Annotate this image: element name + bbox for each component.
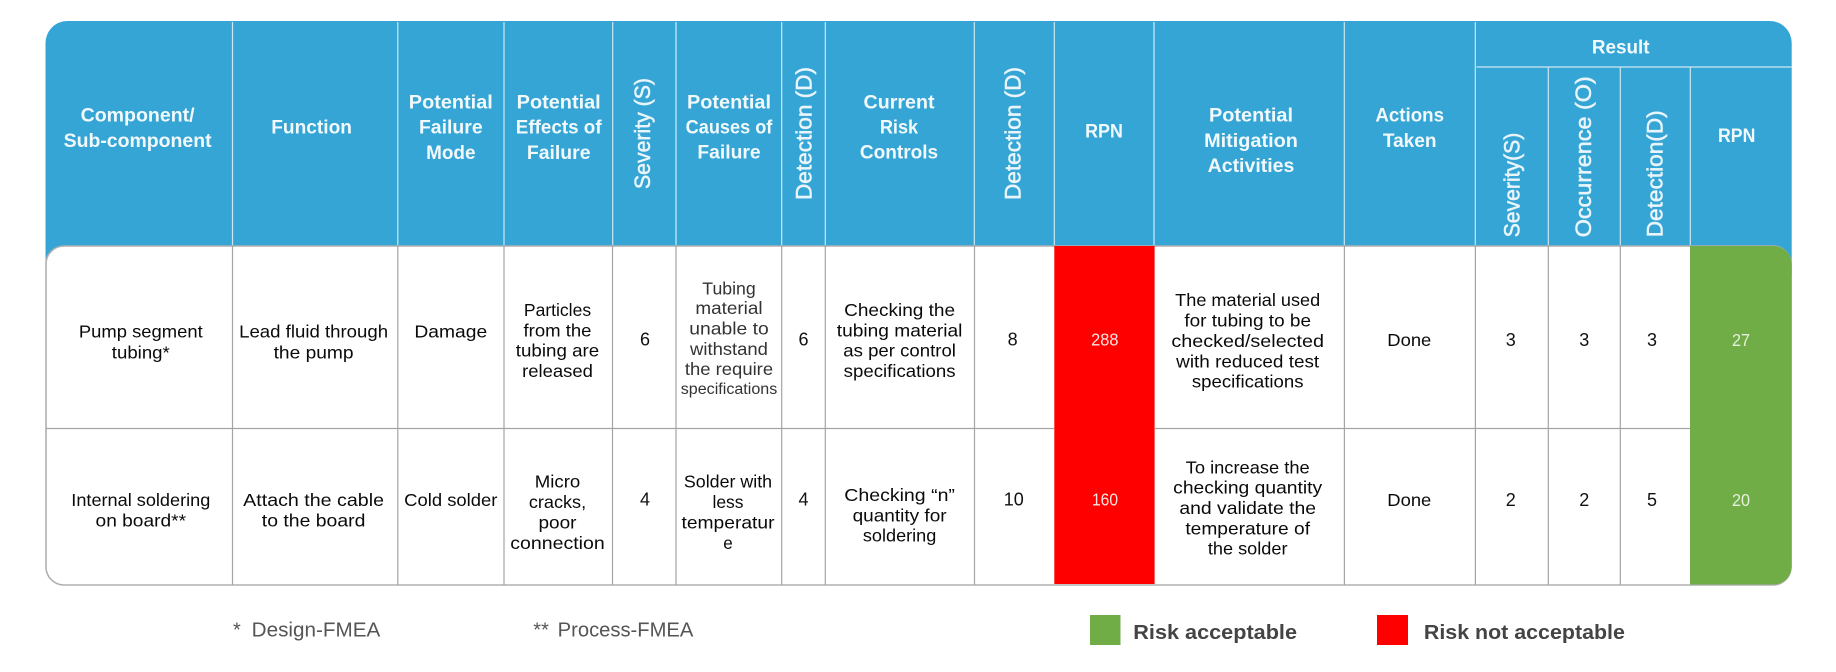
cell: detection: 6 <box>798 330 809 350</box>
cell: result detection: 3 <box>1647 330 1657 350</box>
heading: Potential Failure Mode: Mode <box>426 142 476 164</box>
RPN cells, red <box>1054 246 1155 584</box>
legend: risk acceptable <box>1090 615 1297 645</box>
cell: effects <box>510 472 605 553</box>
cell: current controls: Checking the <box>844 300 955 320</box>
heading: Potential Failure Mode: Potential <box>409 91 493 113</box>
cell: current controls: specifications <box>844 361 956 381</box>
legend: risk not acceptable <box>1377 615 1625 645</box>
heading: Potential Mitigation Activities: Potential <box>1209 105 1293 127</box>
heading: Current Risk Controls: Current <box>864 91 935 113</box>
cell: effects: cracks, <box>529 492 586 512</box>
cell: mitigation: the solder <box>1208 539 1288 559</box>
RPN cells, green <box>1690 246 1792 584</box>
footnote: Design-FMEA: * <box>233 620 241 642</box>
cell: causes: specifications <box>681 381 778 398</box>
cell: detection: 4 <box>798 490 809 510</box>
cell: effects: connection <box>510 533 605 553</box>
cell: function: to the board <box>262 511 365 531</box>
cell: failure mode: Damage <box>414 322 487 342</box>
heading: Detection (D) second: Detection (D) <box>1001 67 1026 200</box>
cell: function: the pump <box>274 342 354 362</box>
cell: mitigation: temperature of <box>1185 518 1310 538</box>
cell: result RPN 20: 20 <box>1732 490 1750 510</box>
cell: detection value: 8 <box>1008 330 1018 350</box>
cell: mitigation: for tubing to be <box>1184 311 1311 331</box>
cell: actions: Done <box>1387 330 1431 350</box>
cell: causes <box>682 472 775 553</box>
cell: current controls: Checking “n” <box>844 485 955 505</box>
cell: component: Internal soldering <box>71 490 210 510</box>
cell: causes: less <box>712 492 744 512</box>
cell: current controls: tubing material <box>837 320 962 340</box>
legend: risk acceptable: Risk acceptable <box>1133 622 1297 644</box>
cell: causes: e <box>723 533 733 553</box>
footnote: Design-FMEA: Design-FMEA <box>252 620 381 642</box>
cell: current controls <box>837 300 962 381</box>
heading: Potential Causes of Failure <box>686 91 773 164</box>
cell: effects <box>516 300 599 381</box>
heading: Detection (D): Detection (D) <box>792 67 817 200</box>
heading: Component/Sub-component: Component/ <box>81 105 195 127</box>
cell: effects: from the <box>524 320 592 340</box>
heading: Result Detection(D): Detection(D) <box>1643 110 1668 237</box>
cell: mitigation <box>1171 290 1324 392</box>
cell: effects: Particles <box>524 300 591 320</box>
heading: Potential Causes of Failure: Causes of <box>686 117 773 139</box>
cell: function: Lead fluid through <box>239 322 388 342</box>
cell: mitigation: with reduced test <box>1175 351 1319 371</box>
cell: component <box>79 322 203 362</box>
cell: mitigation: The material used <box>1175 290 1320 310</box>
cell: causes: material <box>695 298 763 318</box>
heading: Potential Causes of Failure: Failure <box>697 142 761 164</box>
cell: current controls: soldering <box>863 526 936 546</box>
cell: function <box>243 490 384 531</box>
cell: result severity: 3 <box>1506 330 1516 350</box>
cell: current controls: quantity for <box>853 506 947 526</box>
cell: effects: released <box>522 361 593 381</box>
panel: table header band <box>46 21 1792 275</box>
cell: causes: withstand <box>689 339 768 359</box>
cell: function: Attach the cable <box>243 490 384 510</box>
cell: causes: temperatur <box>682 513 775 533</box>
cell: mitigation: checking quantity <box>1173 478 1322 498</box>
row 2: internal soldering <box>71 457 1750 559</box>
cell: component <box>71 490 210 531</box>
cell: function <box>239 322 388 362</box>
heading: Current Risk Controls <box>860 91 938 164</box>
row 1: pump segment tubing <box>79 278 1750 398</box>
heading: Result RPN: RPN <box>1718 125 1755 147</box>
cell: mitigation: To increase the <box>1186 457 1310 477</box>
cell: result RPN 27: 27 <box>1732 330 1750 350</box>
cell: component: Pump segment <box>79 322 203 342</box>
cell: causes: unable to <box>689 318 769 338</box>
cell: result detection: 5 <box>1647 490 1657 510</box>
cell: causes: Solder with <box>684 472 772 492</box>
heading: Result: Result <box>1592 36 1650 58</box>
cell: component: tubing* <box>112 342 170 362</box>
cell: current controls <box>844 485 955 546</box>
cell: severity: 6 <box>640 330 650 350</box>
heading: Component/Sub-component: Sub-component <box>64 130 212 152</box>
cell: mitigation: and validate the <box>1179 498 1316 518</box>
footnote: Process-FMEA: ** <box>533 620 549 642</box>
cell: current controls: as per control <box>843 341 956 361</box>
heading: Potential Failure Mode: Failure <box>419 117 483 139</box>
panel: table body <box>46 246 1791 585</box>
cell: mitigation: specifications <box>1192 372 1304 392</box>
heading: Severity (S): Severity (S) <box>630 78 655 189</box>
cell: RPN 288: 288 <box>1091 330 1118 350</box>
cell: mitigation <box>1173 457 1322 559</box>
cell: effects: tubing are <box>516 341 599 361</box>
cell: causes: the require <box>685 359 773 379</box>
cell: causes: Tubing <box>702 278 756 298</box>
cell: failure mode: Cold solder <box>404 490 498 510</box>
heading: Actions Taken: Actions <box>1375 105 1444 127</box>
heading: Potential Effects of Failure: Failure <box>527 142 591 164</box>
cell: effects: Micro <box>535 472 580 492</box>
footnote: Process-FMEA: Process-FMEA <box>558 620 694 642</box>
cell: result occurrence: 3 <box>1579 330 1589 350</box>
heading: Potential Mitigation Activities: Mitigation <box>1204 130 1298 152</box>
heading: Potential Effects of Failure: Effects of <box>516 117 602 139</box>
heading: Potential Failure Mode <box>409 91 493 164</box>
heading: Actions Taken <box>1375 105 1444 152</box>
cell: detection value: 10 <box>1004 490 1024 510</box>
heading: RPN: RPN <box>1085 121 1123 143</box>
cell: component: on board** <box>96 511 186 531</box>
cell: RPN 160: 160 <box>1092 490 1118 510</box>
legend: risk not acceptable: Risk not acceptable <box>1424 622 1625 644</box>
heading: Result Severity(S): Severity(S) <box>1499 133 1524 237</box>
cell: result occurrence: 2 <box>1579 490 1589 510</box>
cell: mitigation: checked/selected <box>1171 331 1324 351</box>
cell: actions: Done <box>1387 490 1431 510</box>
heading: Potential Effects of Failure: Potential <box>517 91 601 113</box>
heading: Component/Sub-component <box>64 105 212 152</box>
cell: severity: 4 <box>640 490 650 510</box>
heading: Function: Function <box>271 117 352 139</box>
cell: effects: poor <box>538 513 577 533</box>
heading: Potential Mitigation Activities: Activities <box>1208 155 1295 177</box>
heading: Potential Effects of Failure <box>516 91 602 164</box>
heading: Current Risk Controls: Controls <box>860 142 938 164</box>
heading: Actions Taken: Taken <box>1383 130 1437 152</box>
heading: Result Occurrence (O): Occurrence (O) <box>1571 76 1596 237</box>
heading: Potential Causes of Failure: Potential <box>687 91 771 113</box>
heading: Current Risk Controls: Risk <box>880 117 918 139</box>
heading: Potential Mitigation Activities <box>1204 105 1298 177</box>
cell: result severity: 2 <box>1506 490 1516 510</box>
cell: causes <box>681 278 778 398</box>
